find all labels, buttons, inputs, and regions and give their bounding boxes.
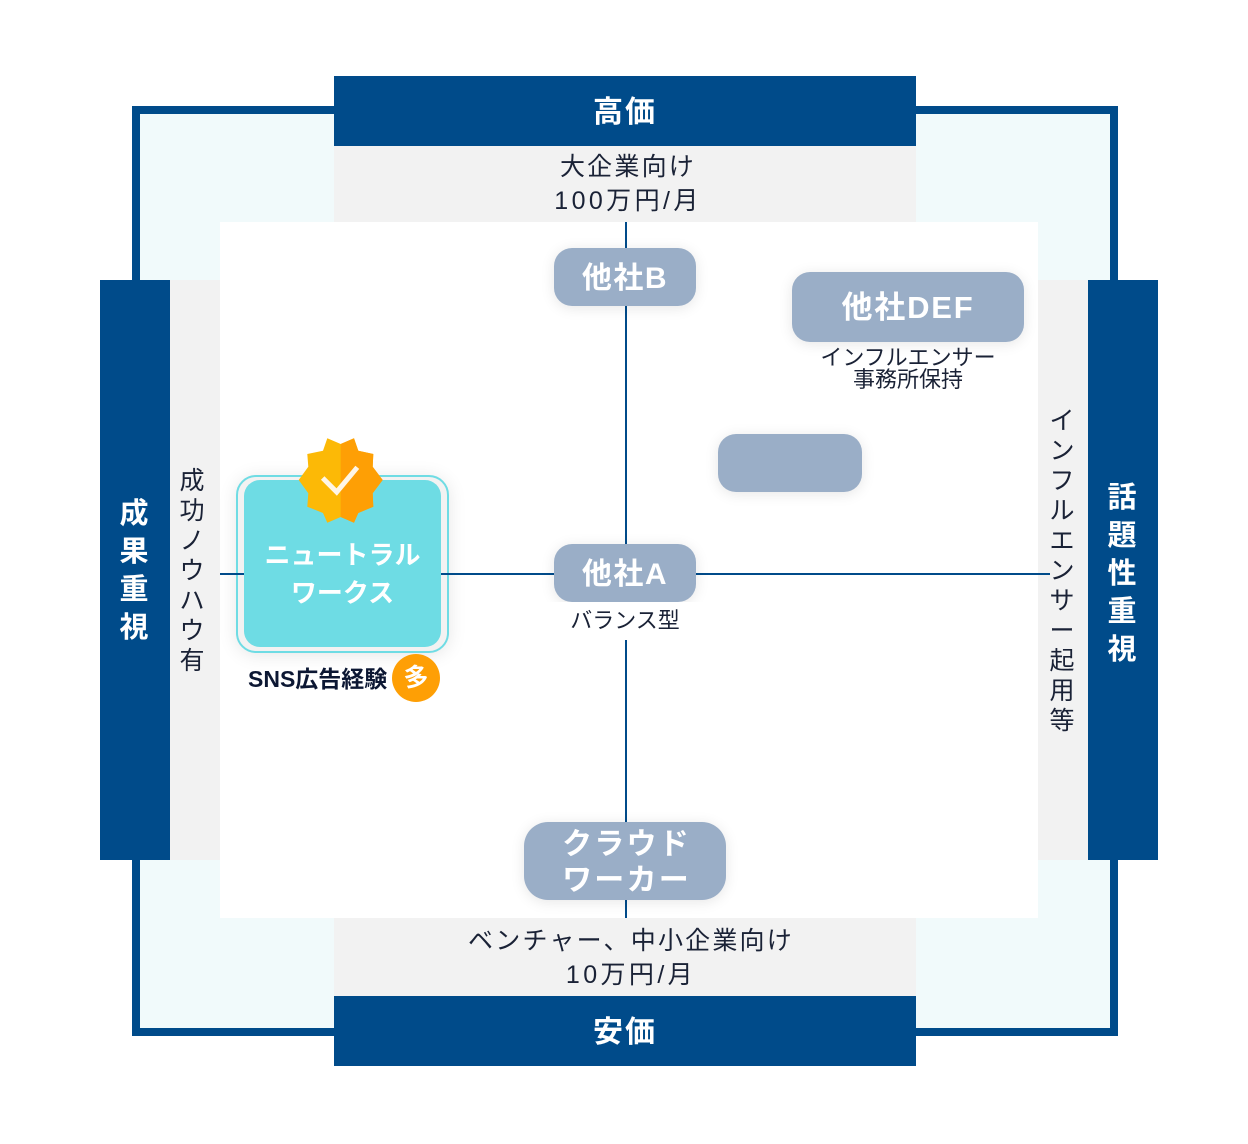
text: left axis description: ウ: [179, 557, 204, 585]
heading: right axis buzz focus: [1088, 280, 1158, 860]
label: unnamed competitor: [718, 434, 862, 492]
card outline: Neutral Works: [236, 475, 449, 653]
icon: check badge: [298, 438, 383, 523]
text: Neutral Works name: ニュートラル: [264, 540, 420, 570]
text: top axis description: 大企業向け: [560, 153, 696, 181]
text: left axis description: [179, 467, 204, 675]
text: left axis description: ハ: [179, 587, 204, 615]
heading text: right axis: 重: [1107, 596, 1136, 628]
text: SNS ad experience: SNS広告経験: [248, 666, 387, 692]
label: competitor A: [554, 544, 696, 602]
text: left axis description: ノ: [179, 527, 204, 555]
text: bottom axis description: 10万円/月: [566, 961, 696, 989]
text: DEF description: インフルエンサー: [820, 345, 996, 370]
heading: left axis results focus: [100, 280, 170, 860]
text: right axis description: イ: [1049, 407, 1074, 435]
text: Neutral Works name: [264, 540, 420, 608]
label: crowd workers: ワーカー: [562, 864, 691, 896]
text: right axis description: フ: [1049, 467, 1074, 495]
text: right axis description: サ: [1049, 587, 1074, 615]
text: left axis description: 功: [179, 497, 204, 525]
panel: bottom label band: [334, 918, 916, 996]
text: right axis description: 用: [1049, 677, 1074, 705]
horizontal axis: [220, 573, 1050, 575]
heading: top axis high price: 高価: [593, 96, 657, 129]
text: DEF description: [820, 345, 996, 392]
text: Neutral Works name: ワークス: [291, 578, 394, 608]
vertical axis: [625, 222, 627, 918]
label: competitor B: [554, 248, 696, 306]
icon: many badge: 多: [403, 664, 428, 692]
label: competitor A: 他社A: [582, 558, 668, 591]
text: right axis description: エ: [1049, 527, 1074, 555]
text: top axis description: 100万円/月: [554, 187, 702, 215]
heading text: right axis: [1107, 482, 1136, 666]
text: left axis description: 成: [179, 467, 204, 495]
icon: many badge: [392, 654, 440, 702]
text: competitor A description: [534, 602, 716, 640]
panel: top label band: [334, 146, 916, 222]
heading: bottom axis low price: [334, 996, 916, 1066]
text: right axis description: [1049, 407, 1074, 735]
text: competitor A description: バランス型: [570, 608, 680, 633]
heading text: right axis: 性: [1107, 558, 1136, 590]
text: top axis description: [554, 153, 702, 215]
outer frame: [132, 106, 1118, 1036]
heading text: left axis: 果: [119, 536, 148, 568]
heading text: right axis: 話: [1107, 482, 1136, 514]
panel: map area: [220, 222, 1038, 918]
heading text: left axis: 成: [119, 498, 148, 530]
text: bottom axis description: ベンチャー、中小企業向け: [468, 927, 794, 955]
heading text: right axis: 題: [1107, 520, 1136, 552]
heading: bottom axis low price: 安価: [593, 1016, 657, 1049]
label: competitor B: 他社B: [582, 262, 668, 295]
label: competitors DEF: 他社DEF: [842, 290, 974, 324]
panel: right label band: [1038, 280, 1088, 860]
heading text: right axis: 視: [1107, 634, 1136, 666]
heading text: left axis: 視: [119, 612, 148, 644]
text: right axis description: ン: [1049, 437, 1074, 465]
label: competitors DEF: [792, 272, 1024, 342]
text: right axis description: ー: [1049, 617, 1074, 645]
text: right axis description: ル: [1049, 497, 1074, 525]
heading text: left axis: 重: [119, 574, 148, 606]
text: DEF description: 事務所保持: [853, 367, 963, 392]
card inner: Neutral Works: [244, 480, 441, 647]
panel: left label band: [170, 280, 220, 860]
text: right axis description: 起: [1049, 647, 1074, 675]
text: left axis description: ウ: [179, 617, 204, 645]
text: right axis description: ン: [1049, 557, 1074, 585]
label: crowd workers: クラウド: [562, 828, 691, 860]
label: crowd workers: [524, 822, 726, 900]
text: left axis description: 有: [179, 647, 204, 675]
text: right axis description: 等: [1049, 707, 1074, 735]
heading: top axis high price: [334, 76, 916, 146]
text: bottom axis description: [468, 927, 794, 989]
heading text: left axis: [119, 498, 148, 644]
